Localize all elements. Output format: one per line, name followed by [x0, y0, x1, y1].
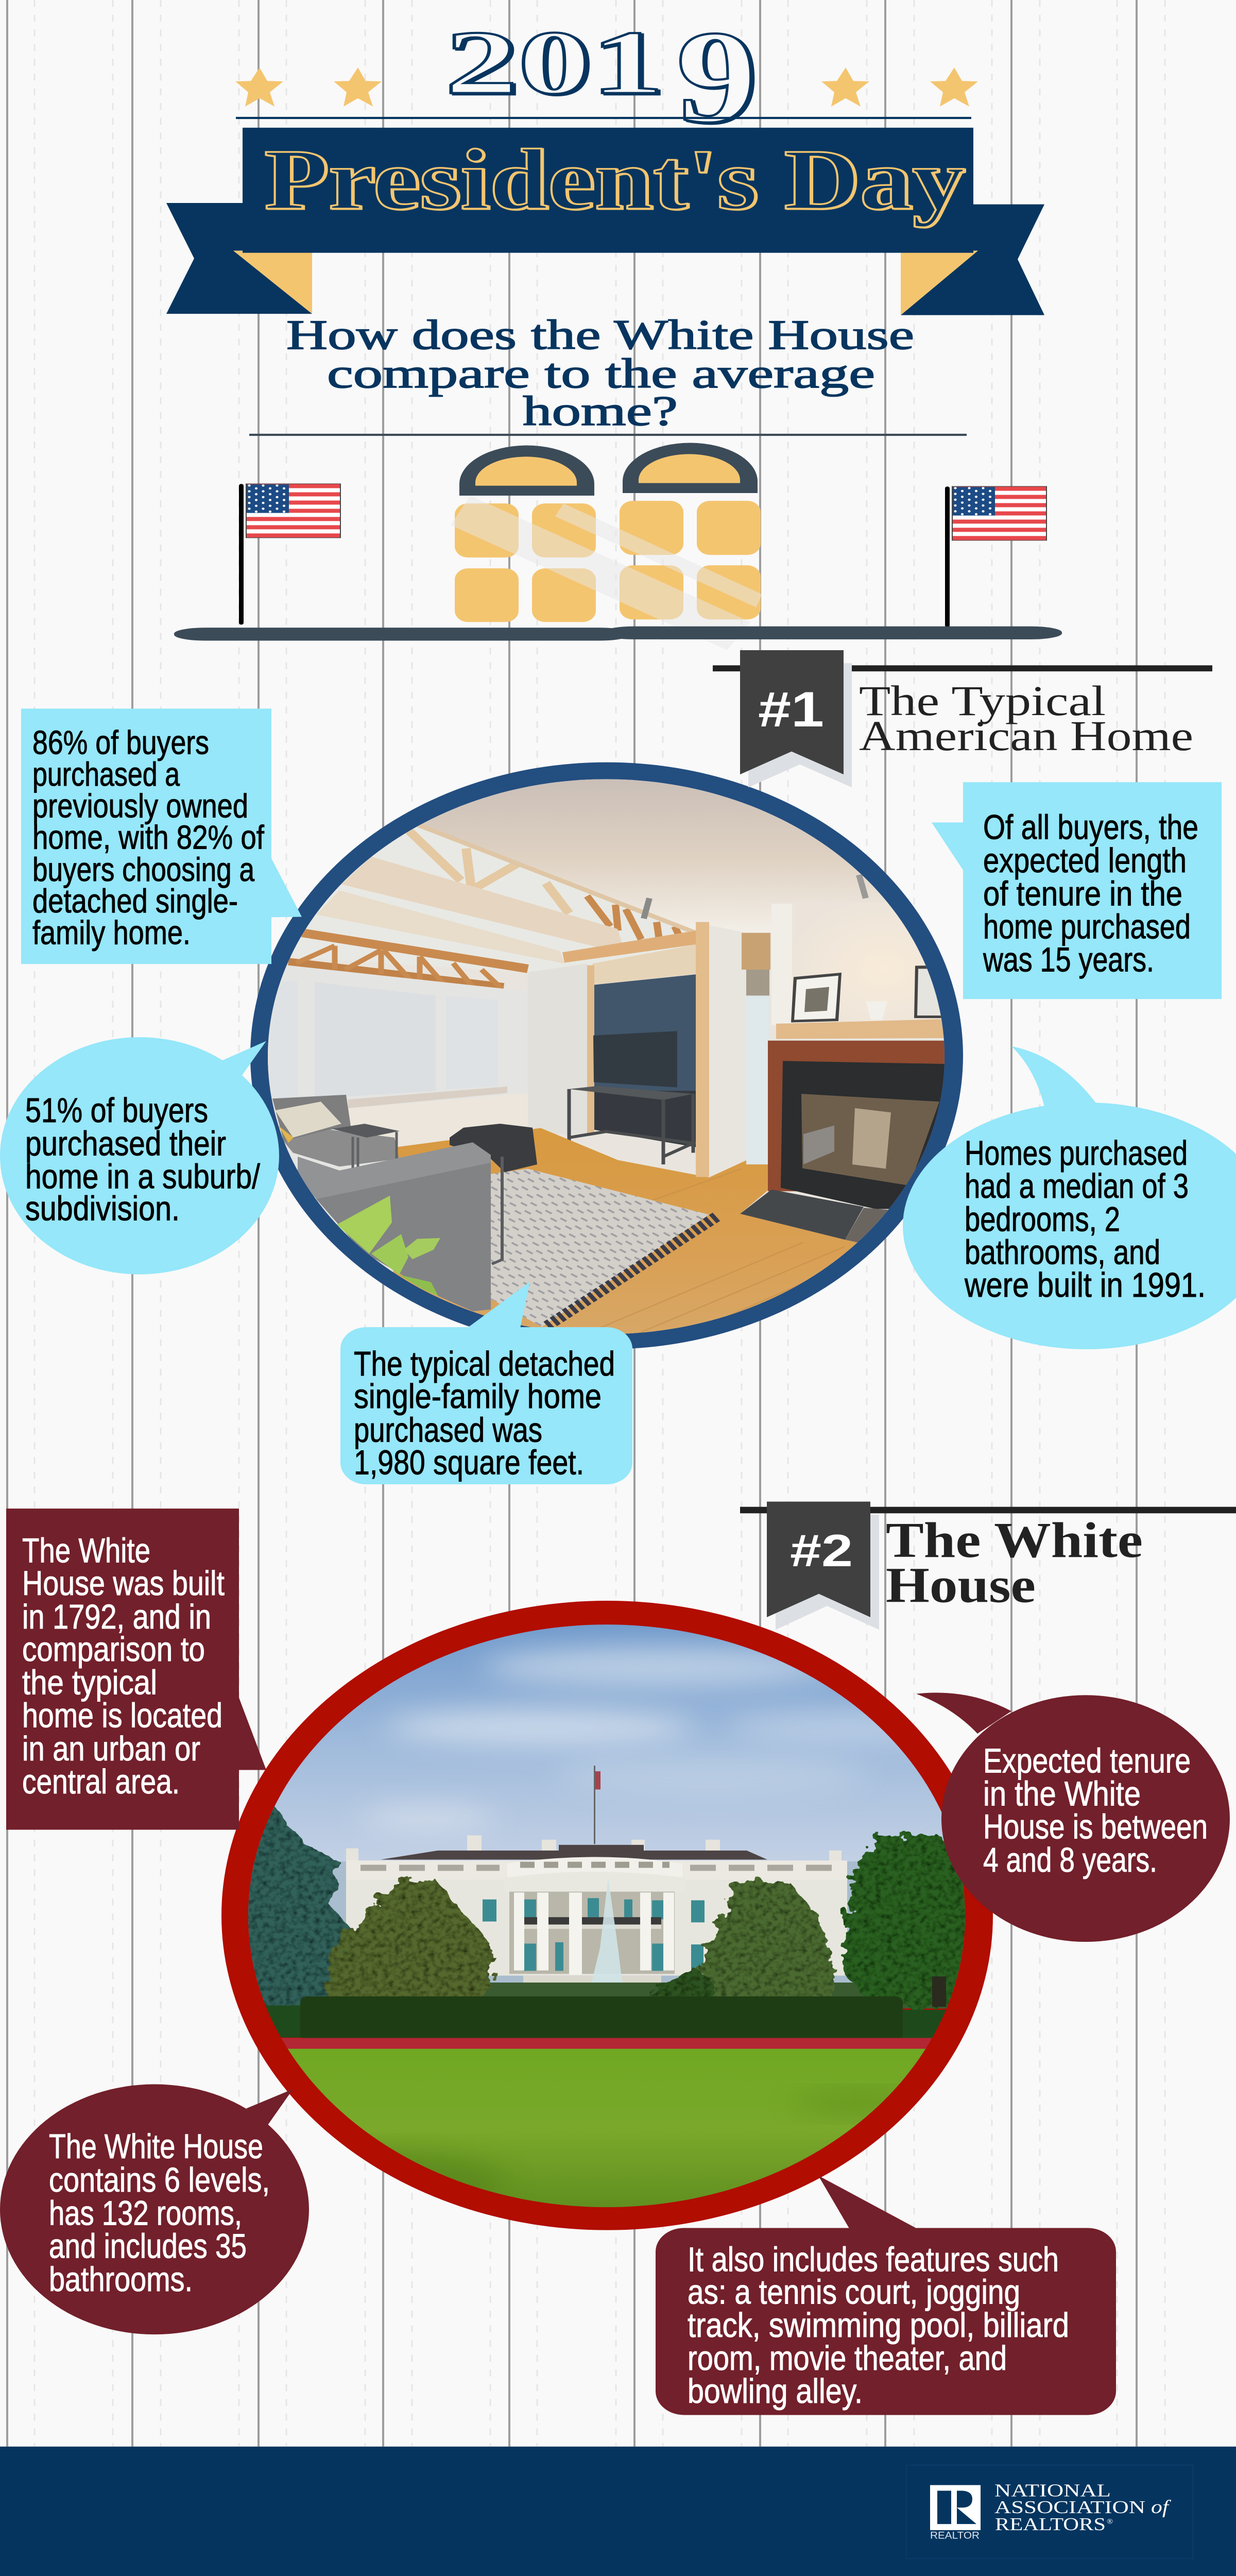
section 1 header: The Typical — [859, 677, 1106, 724]
callout: built in 1792: comparison to — [22, 1631, 205, 1668]
section 1 header — [713, 650, 1212, 787]
callout: length of tenure: was 15 years. — [983, 941, 1154, 979]
subtitle question — [286, 312, 914, 434]
icon: right flag — [945, 486, 1046, 627]
logo: National Association of Realtors: ® — [1107, 2518, 1113, 2526]
callout: expected tenure: 4 and 8 years. — [983, 1841, 1157, 1879]
banner ribbon — [166, 128, 1044, 315]
callout: levels and rooms: contains 6 levels, — [49, 2161, 270, 2199]
icon: gold stars — [235, 67, 978, 107]
icon: building windows — [451, 443, 762, 650]
logo: National Association of Realtors: ASSOCIATION — [994, 2498, 1145, 2517]
section 2 header: House — [886, 1558, 1036, 1613]
callout: expected tenure: in the White — [983, 1775, 1141, 1813]
ring: navy frame — [250, 762, 963, 1349]
callout: bedrooms — [903, 1046, 1236, 1349]
callout: bedrooms: bedrooms, 2 — [965, 1200, 1120, 1239]
callout: built in 1792: home is located — [22, 1697, 222, 1735]
callout: features: bowling alley. — [688, 2372, 863, 2410]
callout: length of tenure — [932, 782, 1222, 999]
callout: previously owned: family home. — [32, 914, 191, 952]
callout: suburb: home in a suburb/ — [25, 1158, 261, 1196]
divider under question — [249, 434, 967, 436]
callout: features: It also includes features such — [688, 2241, 1059, 2279]
section 2 header: #2 — [790, 1525, 853, 1576]
callout: levels and rooms: has 132 rooms, — [49, 2194, 242, 2232]
section 2 header: The White — [886, 1513, 1143, 1568]
callout: levels and rooms: bathrooms. — [49, 2261, 193, 2299]
callout: previously owned: previously owned — [32, 788, 248, 825]
callout: levels and rooms: The White House — [49, 2128, 263, 2166]
callout: previously owned: purchased a — [32, 756, 180, 793]
ground line — [174, 626, 1062, 640]
callout: square feet: The typical detached — [354, 1345, 615, 1383]
title: 2019: 9 — [676, 4, 757, 150]
callout: built in 1792: The White — [22, 1532, 150, 1570]
callout: square feet — [340, 1282, 632, 1484]
callout: suburb: purchased their — [25, 1125, 226, 1163]
icon: left flag — [239, 484, 340, 624]
footer band — [0, 2447, 1236, 2576]
callout: previously owned: buyers choosing a — [32, 851, 254, 888]
callout: previously owned: detached single- — [32, 883, 238, 920]
section 1 header: American Home — [859, 712, 1193, 759]
callout: suburb: 51% of buyers — [25, 1092, 208, 1129]
logo: National Association of Realtors: of — [1151, 2496, 1171, 2517]
logo: National Association of Realtors: REALTOR — [930, 2530, 980, 2541]
callout: built in 1792: in 1792, and in — [22, 1598, 211, 1636]
callout: square feet: 1,980 square feet. — [354, 1444, 584, 1482]
callout: built in 1792 — [6, 1509, 266, 1830]
logo: National Association of Realtors — [906, 2465, 1193, 2558]
subtitle question: How does the White House — [286, 312, 914, 358]
banner heading: President's Day — [264, 131, 965, 227]
callout: features: room, movie theater, and — [688, 2340, 1007, 2378]
title: 2019: 201 — [445, 12, 664, 113]
callout: previously owned — [21, 708, 302, 964]
logo: National Association of Realtors: REALTORS — [995, 2515, 1106, 2534]
callout: built in 1792: House was built — [22, 1565, 225, 1603]
photo: living room — [258, 771, 958, 1342]
ring: red frame — [221, 1601, 993, 2230]
callout: levels and rooms: and includes 35 — [49, 2227, 247, 2265]
callout: built in 1792: the typical — [22, 1664, 157, 1702]
callout: levels and rooms — [0, 2084, 309, 2334]
callout: built in 1792: in an urban or — [22, 1730, 200, 1768]
callout: built in 1792: central area. — [22, 1763, 180, 1801]
callout: previously owned: home, with 82% of — [32, 819, 264, 856]
callout: suburb: subdivision. — [25, 1190, 180, 1228]
callout: square feet: purchased was — [354, 1412, 542, 1449]
logo: National Association of Realtors: NATIONAL — [994, 2481, 1111, 2501]
callout: features: as: a tennis court, jogging — [688, 2273, 1020, 2311]
callout: features: track, swimming pool, billiard — [688, 2307, 1069, 2345]
subtitle question: home? — [523, 388, 678, 434]
section 1 header: #1 — [758, 682, 824, 737]
callout: expected tenure — [916, 1693, 1230, 1942]
section 2 header — [740, 1502, 1236, 1630]
callout: previously owned: 86% of buyers — [32, 724, 209, 761]
subtitle question: compare to the average — [327, 350, 875, 397]
photo: White House — [242, 1619, 973, 2213]
callout: suburb — [0, 1037, 279, 1275]
divider under year — [236, 117, 971, 119]
callout: square feet: single-family home — [354, 1378, 602, 1416]
title: 2019 — [445, 4, 757, 150]
callout: features — [656, 2176, 1116, 2415]
